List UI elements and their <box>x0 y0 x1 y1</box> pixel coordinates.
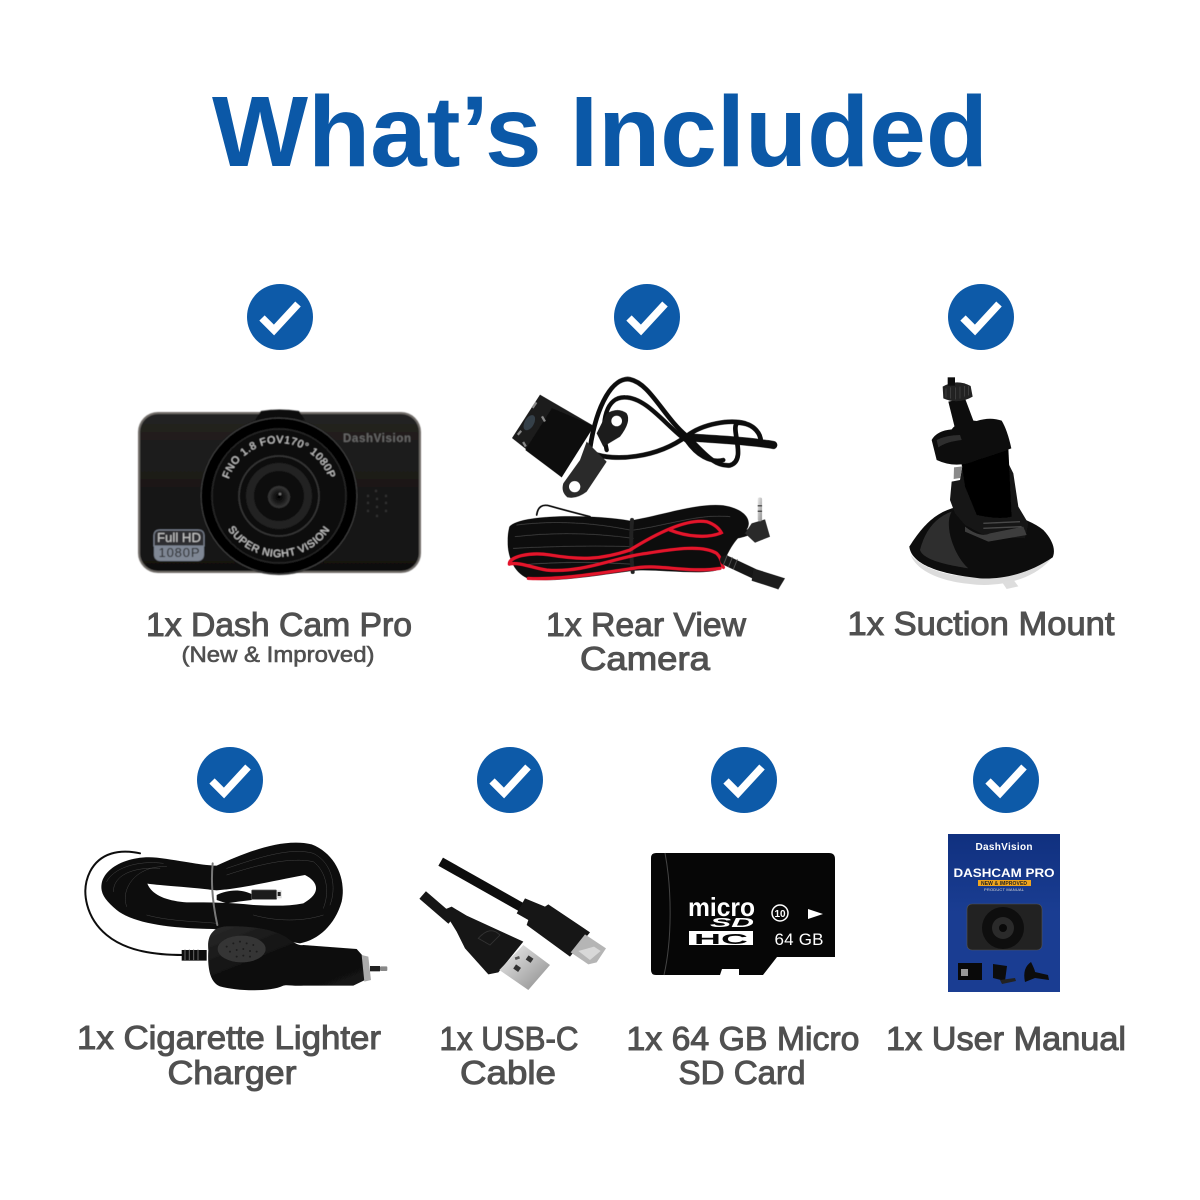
dash cam illustration <box>137 408 422 576</box>
dash cam illustration: 1080P <box>158 545 200 560</box>
class 10 badge <box>772 905 788 921</box>
item: user manual <box>886 747 1126 1057</box>
jack plug <box>723 497 770 543</box>
camera body <box>512 395 594 477</box>
user manual illustration: NEW & IMPROVED <box>981 881 1027 887</box>
usb-c end <box>441 862 606 964</box>
user manual illustration <box>948 834 1060 992</box>
label: suction mount: 1x Suction Mount <box>848 605 1114 642</box>
label: manual: 1x User Manual <box>886 1020 1126 1057</box>
camera wire <box>590 379 773 465</box>
micro usb plug <box>217 890 282 903</box>
label: rear view camera line 2: Camera <box>580 640 711 677</box>
red wires <box>509 521 723 579</box>
label: usb-c line 2: Cable <box>460 1054 556 1091</box>
check icon: dash cam <box>247 284 313 350</box>
usb-c cable illustration <box>423 862 606 990</box>
check icon: charger <box>197 747 263 813</box>
item: suction mount <box>848 284 1114 642</box>
item: usb-c cable <box>423 747 606 1091</box>
micro sd logo: HC <box>694 931 748 948</box>
check icon: manual <box>973 747 1039 813</box>
charger illustration <box>85 843 387 990</box>
charger plug body <box>182 926 387 990</box>
play arrow <box>808 909 823 919</box>
dash cam illustration: Full HD <box>157 530 201 545</box>
cable coil <box>508 505 749 580</box>
label: micro sd line 2: SD Card <box>678 1054 806 1091</box>
dash cam illustration: FNO 1.8 FOV170° 1080P <box>222 434 336 480</box>
micro sd logo: SD <box>710 915 755 930</box>
item: dash cam <box>137 284 422 667</box>
class 10 badge: 10 <box>774 909 786 920</box>
micro sd illustration <box>651 853 835 975</box>
suction mount illustration <box>909 377 1054 589</box>
micro sd logo <box>688 892 755 948</box>
item: rear view camera <box>508 284 785 677</box>
check icon: usb-c <box>477 747 543 813</box>
sub-label: new and improved: (New & Improved) <box>182 642 374 667</box>
item: micro sd card <box>626 747 860 1091</box>
micro sd logo: micro <box>688 892 755 922</box>
rear camera illustration <box>508 379 785 589</box>
item: cigarette lighter charger <box>77 747 387 1091</box>
connector plug <box>723 555 785 589</box>
check icon: suction mount <box>948 284 1014 350</box>
title: What’s Included <box>212 76 988 188</box>
label: micro sd: 1x 64 GB Micro <box>626 1020 860 1057</box>
user manual illustration: DashVision <box>976 842 1032 853</box>
label: dash cam: 1x Dash Cam Pro <box>146 606 412 643</box>
label: charger line 2: Charger <box>168 1054 296 1091</box>
label: rear view camera: 1x Rear View <box>546 606 746 643</box>
cable coil <box>101 843 343 943</box>
label: usb-c: 1x USB-C <box>440 1020 578 1057</box>
check icon: sd card <box>711 747 777 813</box>
check icon: rear camera <box>614 284 680 350</box>
mini dash cam <box>967 904 1042 950</box>
user manual illustration: DASHCAM PRO <box>954 868 1055 880</box>
mini accessories <box>958 962 1049 984</box>
dash cam illustration: SUPER NIGHT VISION <box>228 525 330 558</box>
dash cam illustration: DashVision <box>343 433 411 445</box>
label: charger: 1x Cigarette Lighter <box>77 1019 381 1056</box>
user manual illustration: PRODUCT MANUAL <box>984 887 1025 892</box>
camera mounting bracket <box>563 410 628 498</box>
usb-a end <box>423 895 550 990</box>
capacity: 64 GB <box>774 930 824 949</box>
